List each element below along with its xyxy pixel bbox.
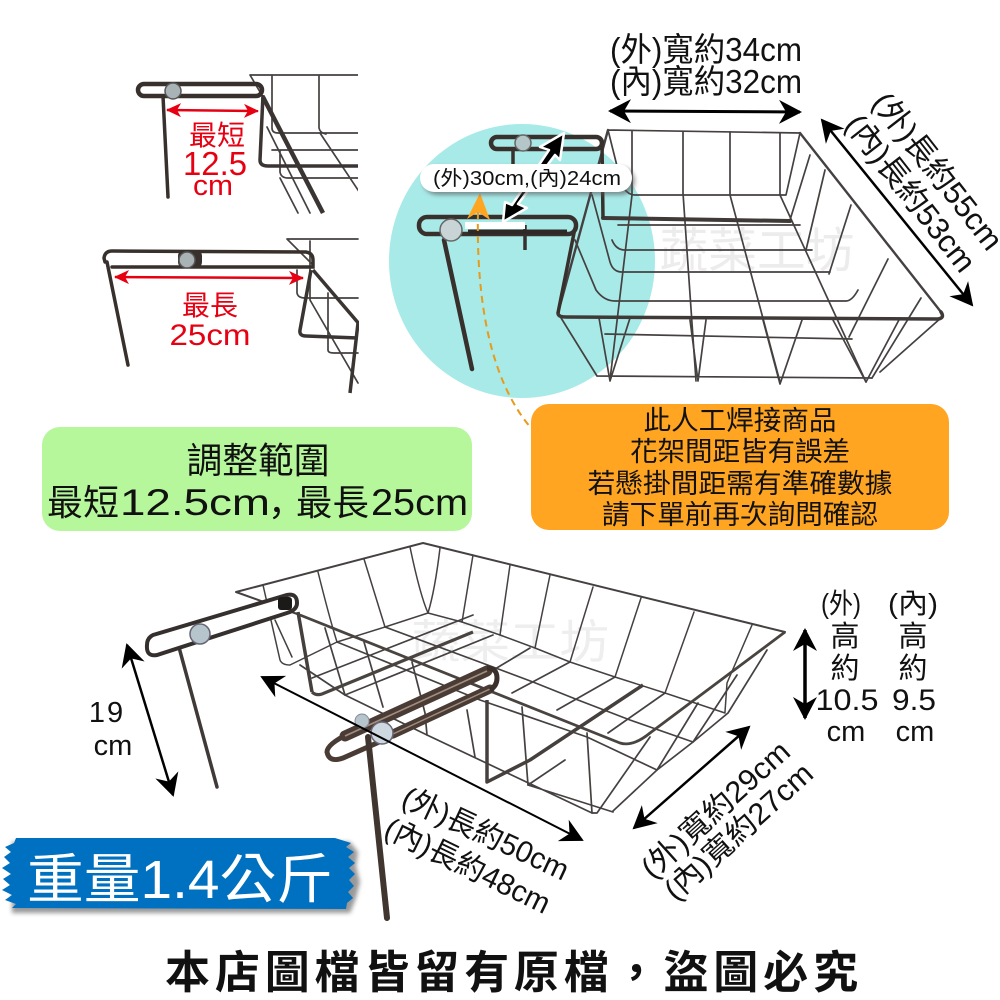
length label bottom: (內)長約48cm	[379, 812, 555, 921]
red arrow: longest	[115, 277, 303, 278]
arrow: bottom width	[634, 727, 749, 828]
arrow: top width	[610, 111, 800, 112]
weight badge	[2, 838, 360, 913]
label: longest 25 cm: 最長	[182, 290, 238, 321]
weight badge: 重量1.4公斤	[27, 850, 333, 910]
height label outer	[816, 588, 878, 748]
panel: adjustment range: 最長	[296, 482, 369, 523]
height label outer: 10.5	[816, 684, 878, 717]
label: shortest 12.5 cm: 最短	[189, 120, 245, 151]
adjustable bracket	[138, 84, 262, 96]
height label outer: 約	[830, 652, 860, 685]
near bracket	[327, 668, 497, 918]
teal highlight circle	[389, 124, 655, 398]
label: 19 cm: cm	[94, 730, 132, 762]
height label inner	[888, 588, 938, 748]
rim and walls	[236, 543, 785, 713]
panel: adjustment range: 25cm	[371, 482, 468, 523]
panel: adjustment range: 最短	[47, 482, 119, 523]
arrow: bottom length	[262, 677, 582, 840]
footer copyright notice: 本店圖檔皆留有原檔，盜圖必究	[165, 947, 858, 998]
length label top right: (內)長約53cm	[838, 108, 983, 279]
panel: longest adjustment photo	[104, 239, 360, 393]
far bracket	[147, 595, 297, 787]
watermark: top: 蔬菜工坊	[660, 225, 854, 278]
label: shortest 12.5 cm: cm	[193, 170, 233, 202]
panel: adjustment range	[42, 427, 472, 531]
panel: top basket	[419, 130, 942, 384]
red arrow: shortest	[167, 110, 258, 111]
panel: handmade notice: 若懸掛間距需有準確數據	[588, 469, 892, 499]
thick rim and rungs	[298, 612, 785, 782]
upper bracket	[513, 143, 603, 218]
width label top: (外)寬約34cm	[610, 31, 802, 68]
width label top	[610, 31, 802, 100]
width label bottom: (外)寬約29cm	[635, 735, 797, 885]
height label outer: (外)	[821, 588, 861, 619]
label: longest 25 cm: 25cm	[170, 319, 250, 352]
lower bracket	[419, 217, 576, 369]
label: shortest 12.5 cm: 12.5	[183, 145, 247, 182]
height label inner: 高	[898, 620, 928, 653]
floor grid	[300, 615, 767, 813]
height label inner: 9.5	[892, 684, 936, 717]
dashed orange leader and arrow	[467, 193, 531, 428]
upper bolt	[515, 135, 531, 151]
basket thick parts	[300, 270, 360, 393]
basket wires	[250, 75, 360, 213]
height label outer: cm	[827, 716, 865, 748]
label: longest 25 cm	[170, 290, 250, 352]
label: 19 cm	[89, 697, 132, 762]
arrow: top length	[822, 120, 972, 305]
basket thick rim	[263, 97, 323, 213]
back wall and floor wires	[558, 130, 942, 384]
pill label: spacing: (外)30cm,(內)24cm	[433, 167, 621, 190]
height label outer: 高	[830, 620, 860, 653]
arrow: leg height	[127, 645, 173, 795]
height label inner: 約	[898, 652, 928, 685]
panel: handmade notice: 花架間距皆有誤差	[630, 437, 850, 467]
panel: handmade notice	[531, 404, 949, 530]
panel: adjustment range: ，	[268, 474, 304, 526]
label: shortest 12.5 cm	[183, 120, 247, 202]
adjustable bracket	[104, 251, 313, 365]
thick rim and rungs	[558, 312, 942, 319]
panel: adjustment range: 12.5cm	[120, 482, 270, 523]
wing bolt	[165, 83, 181, 99]
arrow: height	[803, 630, 807, 718]
panel: bottom basket	[147, 543, 785, 918]
panel: handmade notice: 此人工焊接商品	[644, 406, 836, 436]
wing bolt	[179, 252, 195, 268]
width label bottom: (內)寬約27cm	[658, 757, 820, 907]
length label bottom: (外)長約50cm	[397, 781, 574, 887]
panel: adjustment range: 調整範圍	[186, 440, 330, 481]
height label inner: (內)	[888, 588, 938, 619]
panel: shortest adjustment photo	[138, 75, 360, 213]
pill label: spacing	[420, 164, 635, 195]
basket wires	[287, 239, 358, 383]
label: 19 cm: 19	[89, 697, 125, 729]
width label top: (內)寬約32cm	[610, 63, 802, 100]
double arrow: hanging spacing	[503, 133, 564, 222]
height label inner: cm	[896, 716, 934, 748]
panel: handmade notice: 請下單前再次詢問確認	[602, 500, 878, 530]
watermark: bottom: 蔬菜工坊	[411, 616, 609, 668]
